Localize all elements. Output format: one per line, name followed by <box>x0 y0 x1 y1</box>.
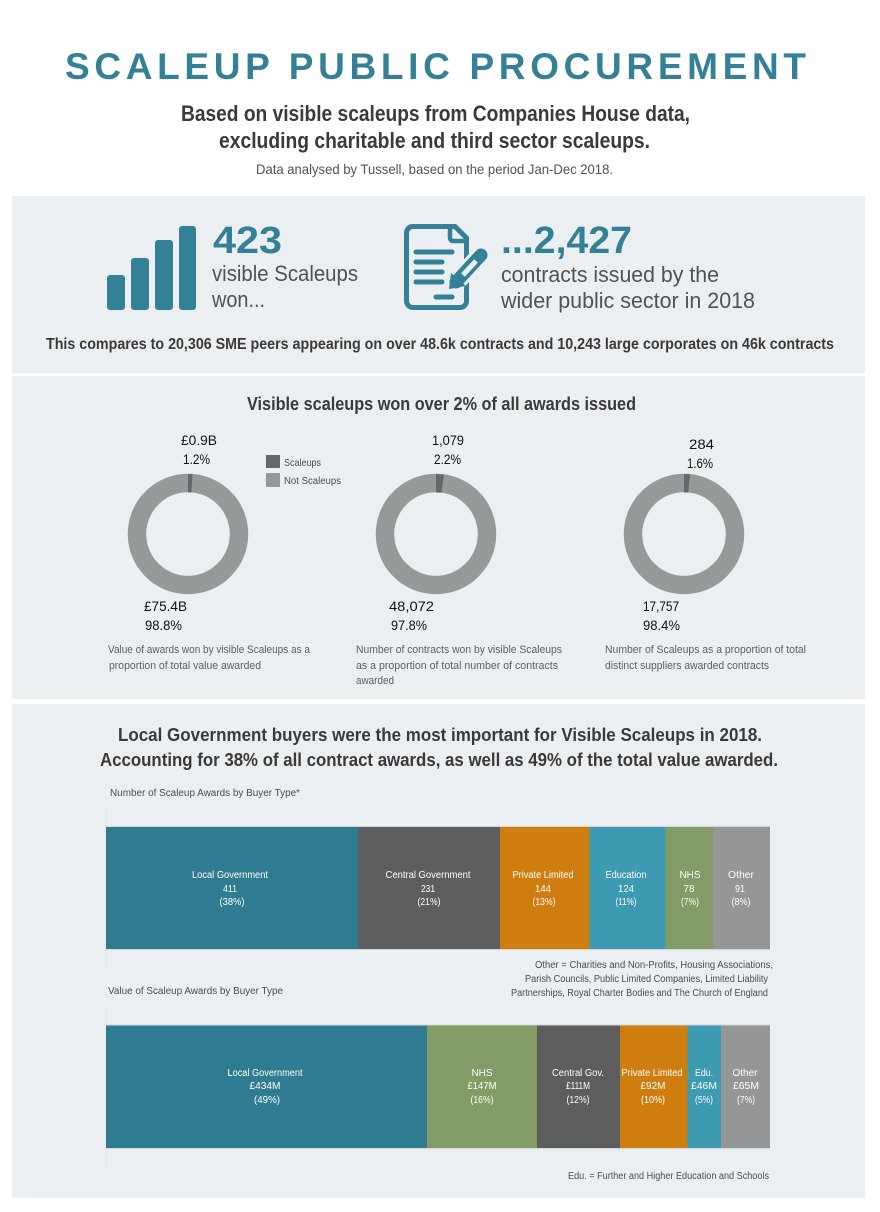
subtitle: excluding charitable and third sector scaleups. <box>219 128 650 153</box>
icon: bar chart <box>107 226 196 310</box>
subtitle <box>181 101 690 153</box>
caption: contracts: as a proportion of total number of contracts <box>356 660 558 672</box>
segment: central government: (12%) <box>566 1095 590 1106</box>
segment: NHS: NHS <box>472 1068 493 1079</box>
donut chart: suppliers: 98.4% <box>643 617 680 633</box>
segment: education: Edu. <box>695 1068 713 1079</box>
panel: share of awards <box>12 376 865 699</box>
title: SCALEUP PUBLIC PROCUREMENT <box>65 46 806 87</box>
segment: education: £46M <box>691 1081 717 1092</box>
icon: document and pen <box>406 226 481 308</box>
segment: local government <box>106 827 358 949</box>
stat: 423 scaleups: won... <box>211 287 265 312</box>
segment: local government: Local Government <box>192 870 268 881</box>
segment: central government: 231 <box>421 884 435 895</box>
data source note: Data analysed by Tussell, based on the period Jan-Dec 2018. <box>256 161 613 177</box>
caption: value: proportion of total value awarded <box>109 660 261 672</box>
segment: NHS <box>427 1026 537 1148</box>
stacked bar: number of awards <box>106 826 770 950</box>
stat: 423 scaleups <box>211 220 358 312</box>
donut chart: suppliers <box>633 436 735 633</box>
segment: education: (11%) <box>616 897 636 908</box>
segment: other: 91 <box>735 884 745 895</box>
segment: other: Other <box>732 1068 758 1079</box>
segment: other <box>713 827 770 949</box>
segment: NHS <box>666 827 713 949</box>
segment: local government: Local Government <box>228 1068 303 1079</box>
segment: education: (5%) <box>695 1095 713 1106</box>
stacked bar: value of awards <box>106 1024 770 1149</box>
legend: Scaleups <box>284 458 321 469</box>
donut chart: suppliers: 284 <box>689 436 714 452</box>
segment: education: 124 <box>618 884 634 895</box>
stat: 2,427 contracts: contracts issued by the <box>501 262 719 287</box>
segment: private limited: (13%) <box>532 897 556 908</box>
segment: central government: Central Gov. <box>552 1068 604 1079</box>
caption: suppliers: distinct suppliers awarded contracts <box>605 660 769 672</box>
segment: NHS: (7%) <box>681 897 699 908</box>
segment: private limited <box>500 827 590 949</box>
donut chart: value: £0.9B <box>181 432 217 448</box>
segment: local government: 411 <box>223 884 237 895</box>
segment: private limited: £92M <box>640 1081 666 1092</box>
segment: education <box>688 1026 721 1148</box>
heading <box>100 725 778 770</box>
note: other definition: Partnerships, Royal Charter Bodies and The Church of England <box>511 988 768 999</box>
heading: Local Government buyers were the most important for Visible Scaleups in 2018. <box>118 725 762 745</box>
legend <box>266 455 341 487</box>
note: education definition: Edu. = Further and Higher Education and Schools <box>568 1171 769 1182</box>
segment: local government <box>106 1026 427 1148</box>
segment: education <box>590 827 666 949</box>
caption: suppliers: Number of Scaleups as a proportion of total <box>605 644 806 656</box>
segment: private limited: (10%) <box>641 1095 665 1106</box>
subtitle: Based on visible scaleups from Companies House data, <box>181 101 690 126</box>
note: other definition <box>511 960 773 999</box>
segment: central government: £111M <box>566 1081 590 1092</box>
heading: Accounting for 38% of all contract awards, as well as 49% of the total value awarded. <box>100 750 778 770</box>
donut chart: value: £75.4B <box>144 598 187 614</box>
note: other definition: Parish Councils, Public Limited Companies, Limited Liability <box>525 974 768 985</box>
stat: 2,427 contracts <box>500 220 755 313</box>
chart title: number of awards: Number of Scaleup Awards by Buyer Type* <box>110 788 300 799</box>
segment: NHS: (16%) <box>470 1095 494 1106</box>
segment: other: (8%) <box>732 897 750 908</box>
stat: 423 scaleups: 423 <box>213 220 282 262</box>
note: other definition: Other = Charities and Non-Profits, Housing Associations, <box>535 960 773 971</box>
segment: central government <box>537 1026 620 1148</box>
segment: other: £65M <box>733 1081 759 1092</box>
segment: other: Other <box>728 870 755 881</box>
chart title: value of awards: Value of Scaleup Awards by Buyer Type <box>108 986 283 997</box>
caption: value: Value of awards won by visible Scaleups as a <box>108 644 311 656</box>
stat: 2,427 contracts: wider public sector in 2018 <box>500 288 755 313</box>
donut chart: value <box>137 432 239 633</box>
segment: private limited: Private Limited <box>512 870 574 881</box>
panel: buyer types <box>12 704 865 1198</box>
caption: value <box>108 644 311 672</box>
segment: central government <box>358 827 500 949</box>
caption: contracts: Number of contracts won by visible Scaleups <box>356 644 562 656</box>
stat: 423 scaleups: visible Scaleups <box>212 261 358 286</box>
panel: headline numbers <box>12 196 865 373</box>
donut chart: contracts: 48,072 <box>389 598 434 614</box>
segment: central government: Central Government <box>386 870 471 881</box>
segment: local government: (38%) <box>220 897 244 908</box>
legend: Not Scaleups <box>284 476 341 487</box>
donut chart: suppliers: 1.6% <box>687 455 713 471</box>
segment: other <box>721 1026 770 1148</box>
donut chart: contracts <box>385 432 487 633</box>
segment: private limited: Private Limited <box>622 1068 682 1079</box>
segment: NHS: NHS <box>680 870 701 881</box>
segment: NHS: £147M <box>468 1081 496 1092</box>
caption: contracts: awarded <box>356 675 394 687</box>
caption: contracts <box>356 644 562 687</box>
segment: other: (7%) <box>737 1095 755 1106</box>
heading: Visible scaleups won over 2% of all awards issued <box>247 394 636 414</box>
segment: central government: (21%) <box>418 897 440 908</box>
donut chart: value: 1.2% <box>183 451 210 467</box>
donut chart: contracts: 1,079 <box>432 432 464 448</box>
segment: private limited <box>620 1026 688 1148</box>
segment: private limited: 144 <box>535 884 551 895</box>
segment: NHS: 78 <box>684 884 695 895</box>
donut chart: contracts: 97.8% <box>391 617 427 633</box>
stat: 2,427 contracts: ...2,427 <box>501 220 632 262</box>
caption: suppliers <box>605 644 806 672</box>
segment: local government: £434M <box>250 1081 280 1092</box>
donut chart: contracts: 2.2% <box>434 451 461 467</box>
segment: education: Education <box>606 870 646 881</box>
segment: local government: (49%) <box>254 1095 280 1106</box>
donut chart: value: 98.8% <box>145 617 182 633</box>
donut chart: suppliers: 17,757 <box>643 598 679 614</box>
